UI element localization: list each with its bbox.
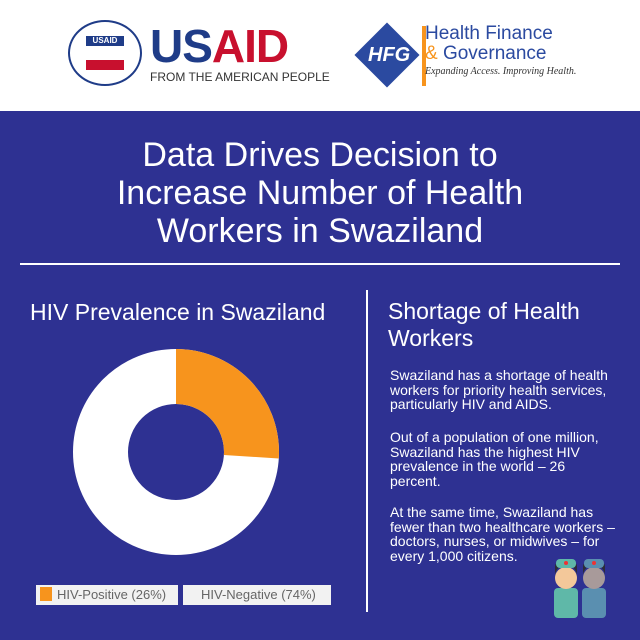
heading: shortage: Shortage of Health <box>388 298 580 324</box>
paragraph 2 <box>390 429 599 489</box>
paragraph 2: Out of a population of one million, <box>390 429 599 445</box>
logo: HFG diamond: HFG <box>368 44 410 66</box>
title: Data Drives Decision to <box>142 136 498 174</box>
paragraph 3: fewer than two healthcare workers – <box>390 518 615 534</box>
heading: shortage <box>388 298 580 351</box>
logo: HFG text: Health Finance <box>425 23 553 44</box>
icon: health workers <box>554 559 606 618</box>
donut chart <box>73 349 279 555</box>
legend: HIV-Positive (26%) <box>57 587 166 602</box>
paragraph 3: every 1,000 citizens. <box>390 548 518 564</box>
paragraph 2: Swaziland has the highest HIV <box>390 444 580 460</box>
heading: shortage: Workers <box>388 325 473 351</box>
logo: HFG text: & Governance <box>425 43 546 64</box>
title <box>117 136 523 250</box>
title: Workers in Swaziland <box>157 212 483 250</box>
logo: USAID wordmark: FROM THE AMERICAN PEOPLE <box>150 70 330 84</box>
legend: HIV-Negative (74%) <box>201 587 316 602</box>
legend <box>36 585 331 605</box>
logo: HFG text: Expanding Access. Improving Health. <box>425 66 576 77</box>
header band <box>0 0 640 111</box>
logo: USAID wordmark <box>150 20 330 84</box>
logo: HFG text <box>424 23 576 77</box>
logo: USAID seal: USAID <box>93 36 117 45</box>
paragraph 3 <box>390 504 615 564</box>
paragraph 2: prevalence in the world – 26 <box>390 458 565 474</box>
paragraph 1 <box>390 367 608 412</box>
logo: HFG diamond <box>354 22 426 88</box>
logo: USAID seal <box>68 20 142 86</box>
paragraph 1: particularly HIV and AIDS. <box>390 396 552 412</box>
paragraph 2: percent. <box>390 472 441 488</box>
chart heading: HIV Prevalence in Swaziland <box>30 299 325 325</box>
paragraph 3: At the same time, Swaziland has <box>390 504 593 520</box>
paragraph 1: workers for priority health services, <box>390 382 606 398</box>
paragraph 1: Swaziland has a shortage of health <box>390 367 608 383</box>
title: Increase Number of Health <box>117 174 523 212</box>
logo: USAID wordmark: USAID <box>150 20 288 72</box>
paragraph 3: doctors, nurses, or midwives – for <box>390 533 599 549</box>
